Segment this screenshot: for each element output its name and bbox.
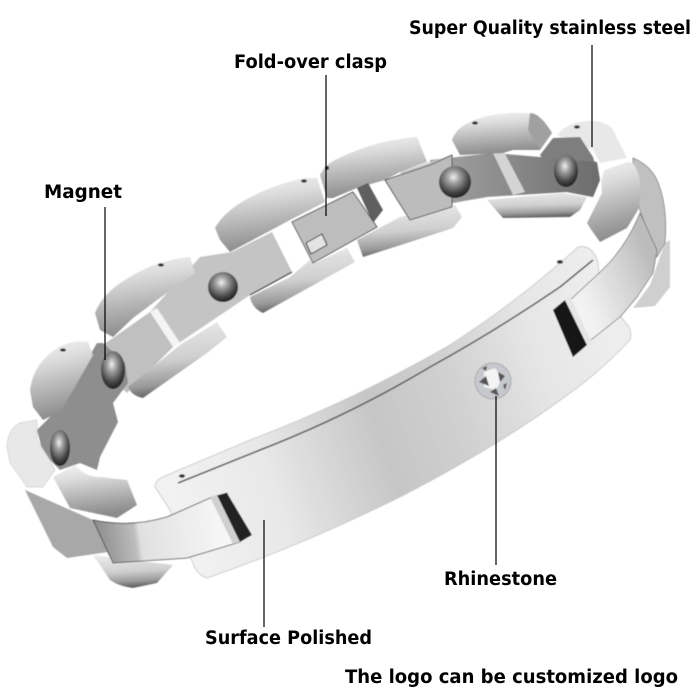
link: lower left cap — [30, 341, 93, 420]
cap: far left top — [7, 420, 55, 487]
main ID plate — [155, 247, 631, 578]
link: far left — [25, 490, 108, 558]
link: left tail — [128, 322, 227, 398]
leader line: magnet — [104, 207, 106, 360]
link: upper right cap — [452, 113, 552, 155]
link: upper right tail — [487, 193, 587, 218]
rhinestone — [475, 363, 511, 399]
band: lower left dark — [37, 343, 128, 470]
leader line: clasp — [325, 75, 327, 216]
connector behind clasp — [357, 183, 383, 223]
link: bottom left — [93, 555, 173, 588]
leader line: stainless steel — [591, 45, 593, 147]
pin holes — [60, 121, 580, 478]
band: centre — [385, 155, 452, 220]
label: magnet: Magnet — [44, 182, 122, 203]
link: lower right outer — [633, 158, 670, 308]
big link over plate right — [568, 213, 657, 343]
clasp tail — [250, 248, 355, 313]
label: stainless steel: Super Quality stainless steel — [409, 18, 691, 39]
label: surface polished: Surface Polished — [205, 628, 372, 649]
shiny link over plate left — [93, 493, 240, 563]
link: left cap — [95, 257, 195, 337]
leader line: surface — [263, 520, 265, 627]
cap: second left — [53, 465, 137, 518]
label: rhinestone: Rhinestone — [444, 569, 557, 590]
band: left upper with magnet — [103, 232, 292, 393]
fold-over clasp plate — [292, 192, 377, 263]
label: fold-over clasp: Fold-over clasp — [234, 52, 387, 73]
link: centre cap — [320, 137, 427, 198]
link: centre tail — [357, 205, 462, 257]
bracelet photo — [7, 113, 670, 588]
label: logo note: The logo can be customized logo — [345, 667, 678, 688]
link: clasp cap — [215, 178, 325, 252]
slot: right — [553, 300, 587, 357]
band: upper right with magnets — [400, 137, 600, 215]
magnets — [50, 155, 578, 466]
link: right connector — [587, 162, 641, 242]
slot: left — [214, 493, 252, 542]
link: top right cap — [557, 121, 627, 163]
leader line: rhinestone — [495, 396, 497, 565]
